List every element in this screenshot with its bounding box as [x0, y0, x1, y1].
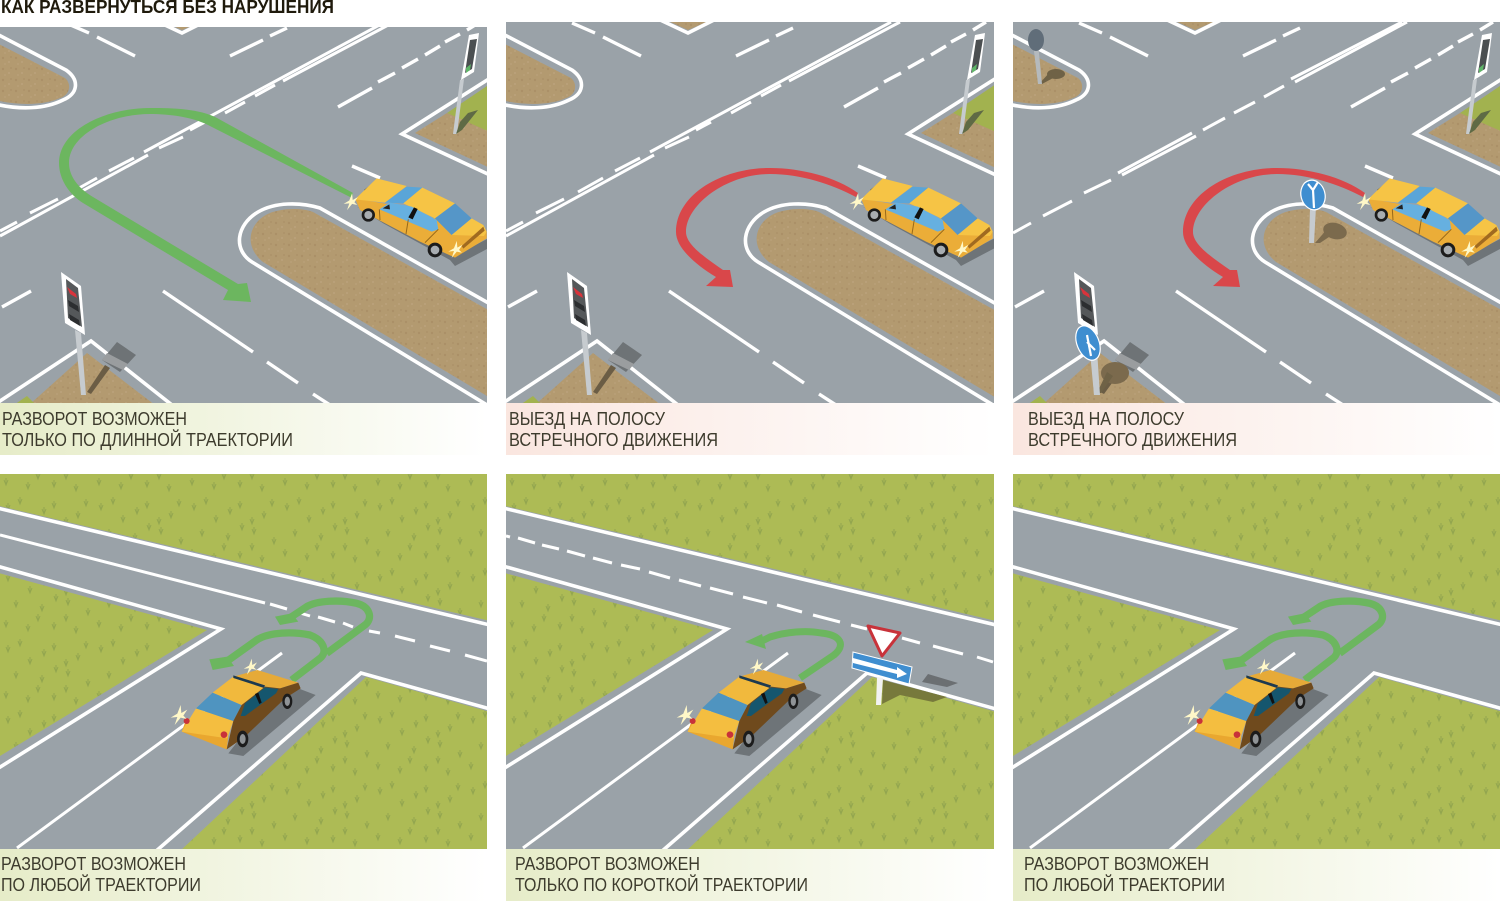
panel: T-junction without centre line — [1008, 472, 1500, 852]
car — [344, 178, 488, 266]
road scene — [0, 18, 492, 408]
traffic light left — [61, 272, 136, 395]
sign: median lane direction — [1300, 180, 1347, 243]
panel: short turn with direction signs — [1008, 18, 1500, 408]
traffic light left — [567, 272, 642, 395]
sign: yield and main-road plate — [852, 626, 958, 705]
caption bar 3: ВЫЕЗД НА ПОЛОСУ — [1028, 409, 1184, 429]
caption bar 6: РАЗВОРОТ ВОЗМОЖЕН — [1024, 854, 1209, 874]
road scene — [1008, 18, 1500, 408]
caption bar 4: РАЗВОРОТ ВОЗМОЖЕН — [1, 854, 186, 874]
caption bar 5: ТОЛЬКО ПО КОРОТКОЙ ТРАЕКТОРИИ — [515, 874, 808, 895]
traffic light left — [1074, 272, 1149, 395]
grass areas — [501, 472, 996, 852]
road centre marking — [1013, 22, 1407, 233]
panel: T-junction with solid then dashed centre line — [0, 472, 490, 852]
green arrows: two trajectories — [1222, 601, 1383, 680]
grass areas — [1008, 472, 1500, 852]
caption bar 6: ПО ЛЮБОЙ ТРАЕКТОРИИ — [1024, 874, 1225, 895]
lane markings — [0, 535, 487, 848]
green short arrow — [745, 632, 840, 678]
caption bar 2 — [506, 403, 994, 455]
asphalt — [506, 474, 996, 850]
caption bar 1 — [0, 403, 487, 455]
grass areas — [0, 472, 490, 852]
caption bar 3 — [1013, 403, 1500, 455]
caption bar 5: РАЗВОРОТ ВОЗМОЖЕН — [515, 854, 700, 874]
caption bar 1: ТОЛЬКО ПО ДЛИННОЙ ТРАЕКТОРИИ — [2, 429, 293, 450]
panel: long U-turn at intersection — [0, 18, 492, 408]
caption bar 6 — [1013, 849, 1500, 901]
panel: short turn over oncoming lane — [501, 18, 998, 408]
traffic light right — [453, 33, 479, 134]
green arrows: two trajectories — [209, 601, 370, 680]
caption bar 5 — [506, 849, 994, 901]
road edges — [1010, 508, 1500, 852]
red short trajectory arrow — [1183, 168, 1365, 287]
road scene — [501, 18, 998, 408]
traffic light right — [1466, 33, 1492, 134]
asphalt — [0, 474, 490, 850]
road centre marking — [506, 22, 900, 236]
caption bar 4: ПО ЛЮБОЙ ТРАЕКТОРИИ — [1, 874, 201, 895]
caption bar 1: РАЗВОРОТ ВОЗМОЖЕН — [2, 409, 187, 429]
sign: far-left dim sign — [1028, 29, 1065, 84]
car — [1184, 659, 1329, 756]
traffic light right — [959, 33, 985, 134]
caption bar 4 — [0, 849, 487, 901]
sign: lower-left lane direction — [1075, 326, 1129, 395]
caption bar 2: ВЫЕЗД НА ПОЛОСУ — [509, 409, 665, 429]
car — [1357, 178, 1500, 266]
car — [171, 659, 316, 756]
caption bar 3: ВСТРЕЧНОГО ДВИЖЕНИЯ — [1028, 430, 1237, 450]
car — [677, 659, 822, 756]
road edges — [503, 508, 996, 852]
green long trajectory arrow — [59, 108, 353, 302]
red short trajectory arrow — [676, 168, 858, 287]
caption bar 2: ВСТРЕЧНОГО ДВИЖЕНИЯ — [509, 430, 718, 450]
road centre marking — [0, 22, 394, 236]
panel: T-junction with yield sign — [501, 472, 996, 852]
car — [850, 178, 994, 266]
lane markings — [506, 536, 993, 848]
asphalt — [1013, 474, 1500, 850]
lane marking — [1030, 653, 1295, 848]
road edges — [0, 508, 490, 852]
